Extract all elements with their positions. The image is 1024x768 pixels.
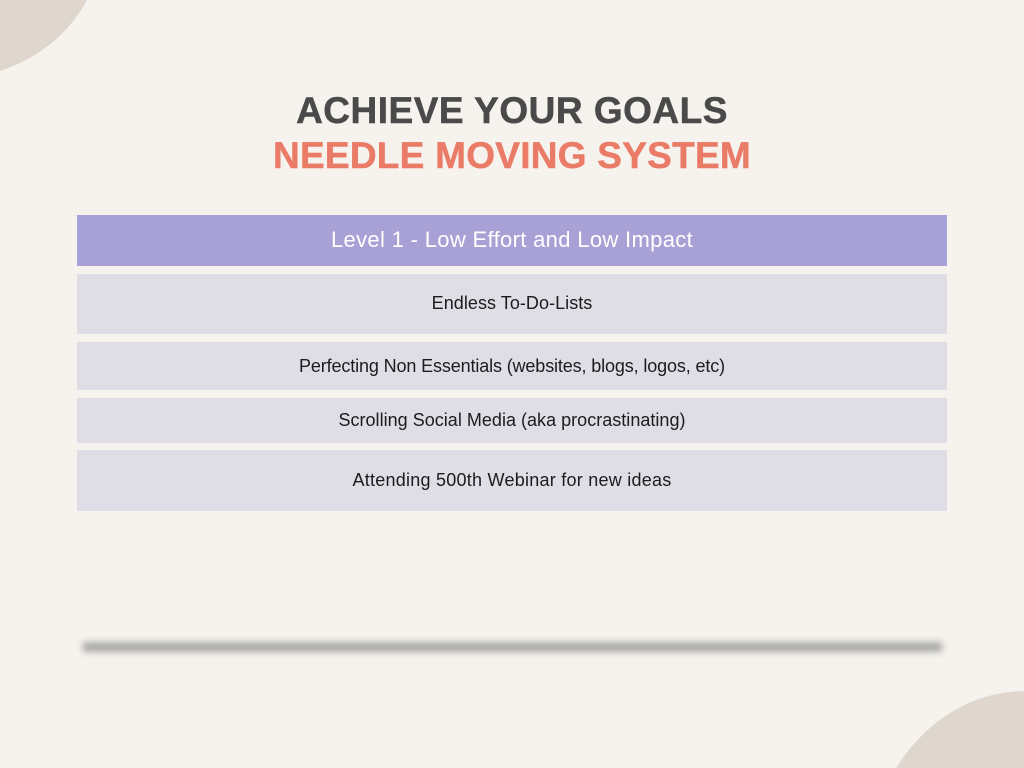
list item: to-do lists: Endless To-Do-Lists bbox=[432, 292, 592, 312]
list item: social media bbox=[77, 398, 947, 443]
list item: to-do lists bbox=[77, 274, 947, 334]
blurred shadow bar bbox=[83, 642, 942, 652]
decorative blob: top left bbox=[0, 0, 87, 71]
title line 1: ACHIEVE YOUR GOALS bbox=[296, 90, 728, 131]
list item: webinar bbox=[77, 450, 947, 511]
list item: non essentials bbox=[77, 342, 947, 390]
list item: webinar: Attending 500th Webinar for new ideas bbox=[352, 470, 672, 490]
list item: social media: Scrolling Social Media (aka procrastinating) bbox=[338, 410, 686, 430]
decorative blob: bottom right bbox=[896, 691, 1024, 768]
list item: non essentials: Perfecting Non Essentials (websites, blogs, logos, etc) bbox=[299, 356, 725, 376]
level header bar bbox=[77, 215, 947, 266]
level header bar: Level 1 - Low Effort and Low Impact bbox=[331, 226, 693, 252]
title line 2: NEEDLE MOVING SYSTEM bbox=[273, 135, 751, 176]
